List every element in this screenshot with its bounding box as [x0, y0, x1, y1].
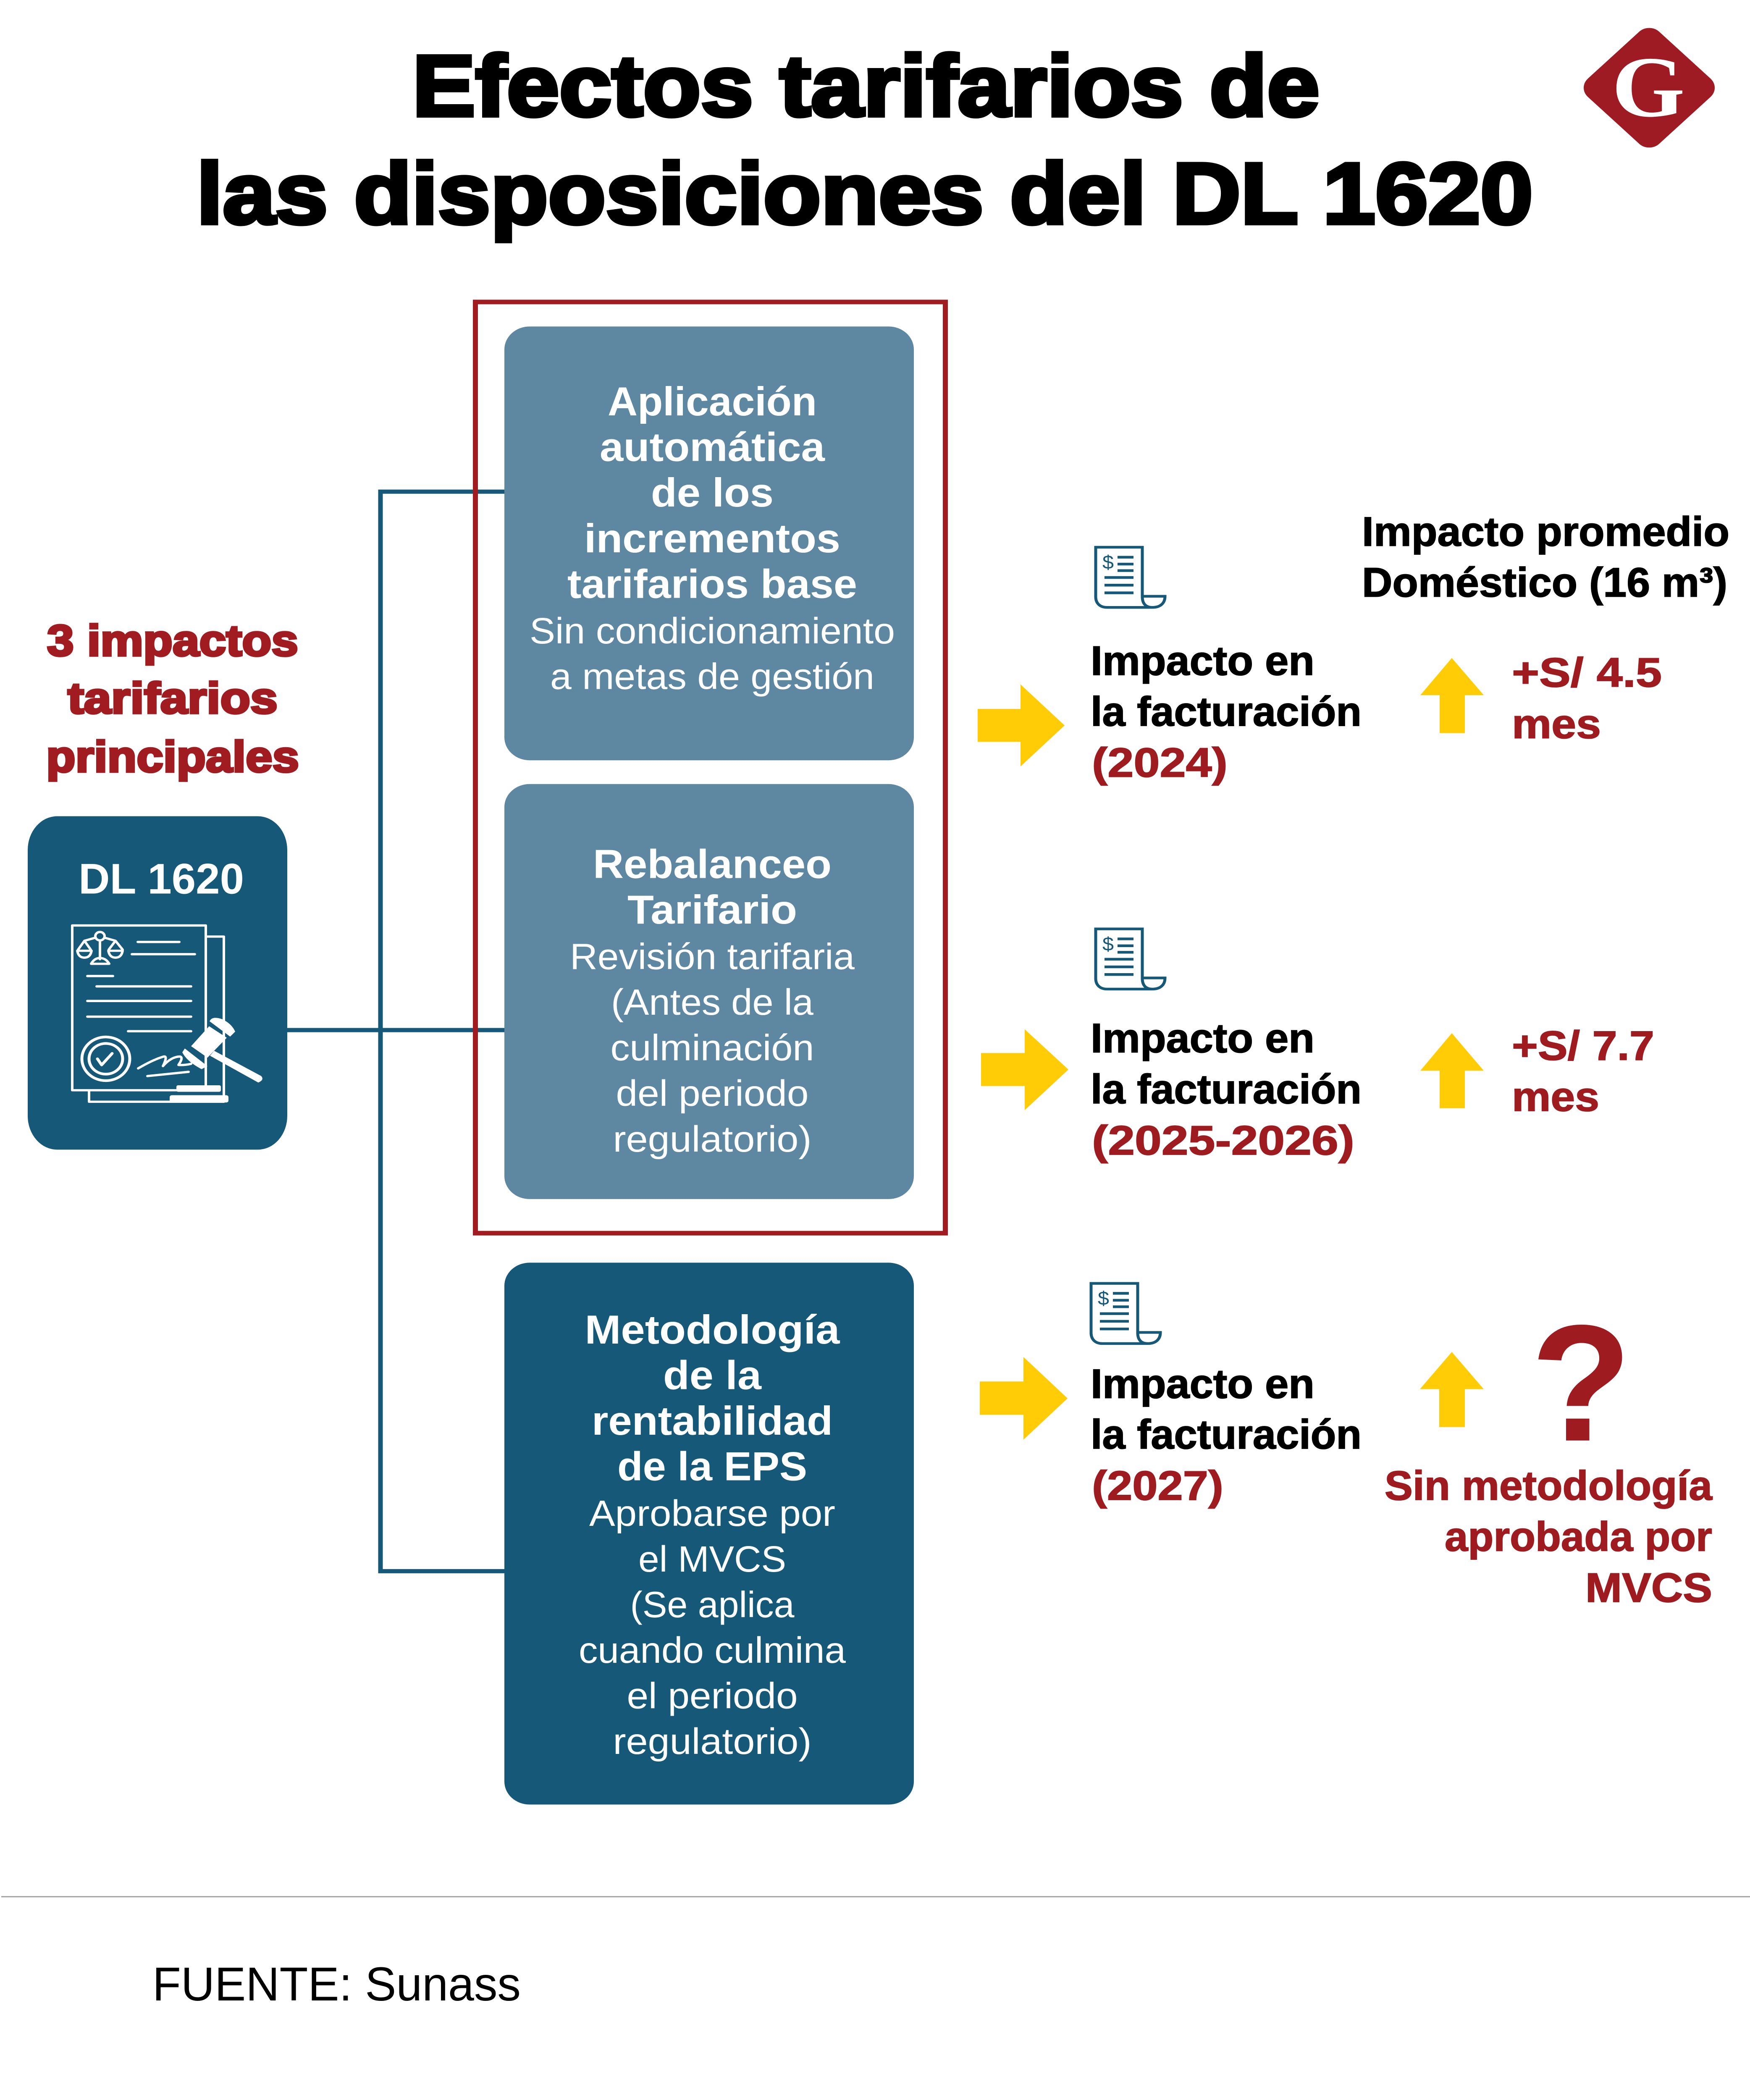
panel: aplicación automática: [504, 326, 914, 760]
title: las disposiciones del DL 1620: [197, 145, 1533, 242]
value: +S/ 7.7 mes: +S/ 7.7: [1512, 1022, 1654, 1069]
panel: rebalanceo tarifario: Tarifario: [627, 887, 797, 932]
connector lines from DL 1620 to the three boxes: [287, 492, 504, 1571]
panel: metodología de la rentabilidad: (Se aplica: [630, 1584, 795, 1625]
text: impacto en la facturación 2027: (2027): [1092, 1462, 1223, 1509]
panel: metodología de la rentabilidad: el MVCS: [638, 1539, 786, 1580]
value: +S/ 4.5 mes: +S/ 4.5: [1512, 649, 1662, 696]
text: impacto en la facturación 2025-2026: la facturación: [1091, 1066, 1362, 1112]
panel: rebalanceo tarifario: Revisión tarifaria: [570, 936, 855, 977]
text: impacto en la facturación 2027: Impacto en: [1091, 1360, 1314, 1407]
red frame around the first two boxes: [475, 302, 945, 1233]
text: impacto en la facturación 2024: (2024): [1092, 739, 1228, 785]
panel: metodología de la rentabilidad: Metodología: [585, 1307, 840, 1352]
icon: receipt, row 1: [1096, 547, 1165, 607]
note: sin metodología aprobada por MVCS: [1385, 1462, 1713, 1611]
heading: 3 impactos tarifarios principales: tarifarios: [68, 674, 278, 723]
note: sin metodología aprobada por MVCS: aprobada por: [1445, 1513, 1712, 1559]
panel: rebalanceo tarifario: regulatorio): [613, 1119, 811, 1160]
value: +S/ 7.7 mes: [1512, 1022, 1654, 1120]
note: sin metodología aprobada por MVCS: Sin metodología: [1385, 1462, 1713, 1509]
panel: aplicación automática: tarifarios base: [567, 561, 857, 606]
arrow: right, row 2: [981, 1029, 1068, 1110]
icon: receipt, row 3: [1091, 1284, 1160, 1344]
value: +S/ 4.5 mes: [1512, 649, 1662, 747]
panel: metodología de la rentabilidad: rentabilidad: [592, 1398, 833, 1444]
panel: metodología de la rentabilidad: Aprobarse por: [589, 1493, 835, 1534]
panel: aplicación automática: a metas de gestión: [550, 656, 874, 697]
panel: metodología de la rentabilidad: cuando culmina: [579, 1630, 846, 1671]
value: +S/ 7.7 mes: mes: [1512, 1073, 1599, 1120]
column heading: impacto promedio doméstico: [1362, 508, 1729, 606]
icon: receipt, row 3: $: [1098, 1288, 1109, 1309]
text: impacto en la facturación 2024: la facturación: [1091, 688, 1362, 735]
label: DL 1620: DL 1620: [79, 855, 244, 903]
column heading: impacto promedio doméstico: Impacto promedio: [1362, 508, 1729, 554]
source: FUENTE: Sunass: [152, 1958, 521, 2011]
icon: legal document with scales, seal and gavel: [72, 925, 224, 1102]
logo: Gestión G diamond: G: [1612, 39, 1685, 135]
panel: rebalanceo tarifario: culminación: [611, 1027, 814, 1068]
icon: receipt, row 2: [1096, 929, 1165, 989]
text: impacto en la facturación 2025-2026: [1091, 1015, 1362, 1163]
column heading: impacto promedio doméstico: Doméstico (16 m³): [1362, 559, 1727, 606]
panel: aplicación automática: de los: [651, 470, 774, 515]
note: sin metodología aprobada por MVCS: MVCS: [1585, 1564, 1712, 1611]
question mark: ?: [1531, 1290, 1632, 1476]
panel: aplicación automática: automática: [600, 424, 826, 470]
text: impacto en la facturación 2024: Impacto en: [1091, 637, 1314, 684]
title: [197, 37, 1533, 242]
heading: 3 impactos tarifarios principales: principales: [46, 732, 299, 781]
panel: rebalanceo tarifario: (Antes de la: [611, 982, 814, 1023]
arrow: up, row 2: [1420, 1033, 1484, 1108]
panel: aplicación automática: incrementos: [584, 515, 840, 561]
heading: 3 impactos tarifarios principales: 3 impactos: [47, 617, 298, 665]
value: +S/ 4.5 mes: mes: [1512, 701, 1601, 747]
text: impacto en la facturación 2025-2026: (2025-2026): [1092, 1117, 1354, 1163]
panel: metodología de la rentabilidad: el periodo: [627, 1675, 798, 1717]
logo: Gestión G diamond: [1584, 28, 1715, 147]
arrow: up, row 1: [1420, 658, 1484, 733]
text: impacto en la facturación 2025-2026: Impacto en: [1091, 1015, 1314, 1061]
panel: DL 1620: [28, 816, 287, 1150]
panel: rebalanceo tarifario: Rebalanceo: [593, 841, 832, 887]
panel: metodología de la rentabilidad: regulatorio): [613, 1721, 811, 1762]
arrow: right, row 3: [980, 1357, 1068, 1440]
panel: aplicación automática: Sin condicionamiento: [530, 611, 895, 651]
icon: gavel: [170, 1018, 262, 1102]
arrow: right, row 1: [978, 685, 1065, 766]
arrow: up, row 3: [1420, 1352, 1484, 1427]
icon: receipt, row 2: $: [1102, 934, 1114, 955]
panel: metodología de la rentabilidad: de la: [663, 1352, 762, 1398]
panel: rebalanceo tarifario: del periodo: [616, 1073, 808, 1114]
panel: metodología de la rentabilidad: de la EPS: [617, 1444, 807, 1489]
title: Efectos tarifarios de: [412, 37, 1320, 134]
icon: receipt, row 1: $: [1102, 552, 1114, 573]
panel: metodología de la rentabilidad: [504, 1263, 914, 1805]
panel: aplicación automática: Aplicación: [608, 378, 817, 424]
panel: rebalanceo tarifario: [504, 784, 914, 1199]
heading: 3 impactos tarifarios principales: [46, 617, 299, 781]
text: impacto en la facturación 2024: [1091, 637, 1362, 785]
text: impacto en la facturación 2027: la facturación: [1091, 1411, 1362, 1457]
text: impacto en la facturación 2027: [1091, 1360, 1362, 1509]
